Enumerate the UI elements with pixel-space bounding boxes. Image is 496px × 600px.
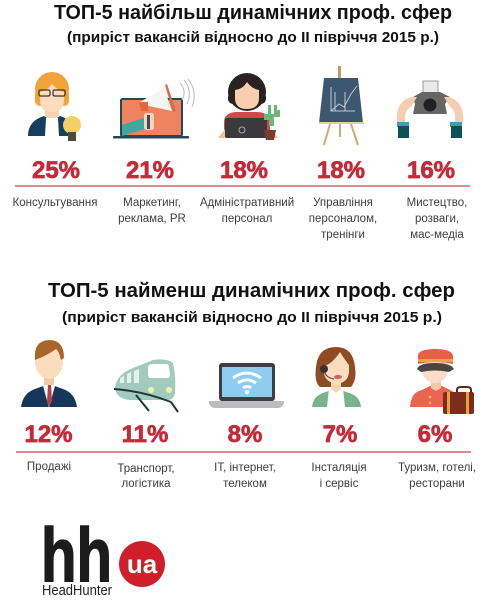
logo: hh.ua HeadHunter: hh xyxy=(41,513,112,598)
icon: hands holding camera xyxy=(397,81,463,138)
labels row 1: персоналом, xyxy=(309,213,377,225)
labels row 1: Консультування xyxy=(13,197,97,209)
title: least dynamic: ТОП-5 найменш динамічних проф. сфер xyxy=(48,280,455,302)
percentages row 2 xyxy=(24,421,452,448)
title: least dynamic xyxy=(48,280,455,326)
labels row 1: розваги, xyxy=(415,213,459,225)
title: least dynamic: (приріст вакансій відносно до II півріччя 2015 р.) xyxy=(62,309,442,326)
icon: administrative worker at laptop xyxy=(218,73,280,140)
logo: hh.ua HeadHunter: ua xyxy=(127,549,158,579)
labels row 2: Продажі xyxy=(27,461,71,473)
percentages row 1: 16% xyxy=(407,157,455,184)
labels row 1 xyxy=(13,197,467,241)
labels row 1: Мистецтво, xyxy=(407,197,467,209)
percentages row 2: 11% xyxy=(122,421,168,448)
icon: easel with chart xyxy=(319,66,364,145)
labels row 1: мас-медіа xyxy=(410,229,464,241)
labels row 1: Адміністративний xyxy=(200,197,294,209)
labels row 2: і сервіс xyxy=(320,478,359,490)
icon: train xyxy=(114,359,178,412)
percentages row 1 xyxy=(32,157,455,184)
icon: marketing laptop with megaphone xyxy=(113,79,194,138)
percentages row 1: 21% xyxy=(126,157,174,184)
percentages row 2: 6% xyxy=(418,421,452,448)
labels row 1: персонал xyxy=(222,213,272,225)
percentages row 2: 8% xyxy=(228,421,262,448)
labels row 1: Управління xyxy=(313,197,373,209)
labels row 2: Транспорт, xyxy=(117,463,175,475)
logo: hh.ua HeadHunter: HeadHunter xyxy=(42,582,112,599)
labels row 2: логістика xyxy=(121,478,171,490)
percentages row 1: 25% xyxy=(32,157,80,184)
percentages row 1: 18% xyxy=(317,157,365,184)
labels row 1: Маркетинг, xyxy=(123,197,181,209)
title: most dynamic xyxy=(54,2,452,46)
icon: support operator with headset xyxy=(312,347,361,407)
title: most dynamic: (приріст вакансій відносно до II півріччя 2015 р.) xyxy=(67,29,439,46)
icon: consultant with light bulb xyxy=(28,72,81,141)
labels row 2: Туризм, готелі, xyxy=(398,462,476,474)
labels row 1: тренінги xyxy=(321,229,365,241)
labels row 2: IT, інтернет, xyxy=(214,462,276,474)
percentages row 2: 12% xyxy=(24,421,73,448)
labels row 1: реклама, PR xyxy=(118,213,186,225)
labels row 2: телеком xyxy=(223,478,267,490)
percentages row 1: 18% xyxy=(220,157,268,184)
labels row 2: ресторани xyxy=(409,478,465,490)
icon: laptop with wifi xyxy=(209,363,284,408)
title: most dynamic: ТОП-5 найбільш динамічних проф. сфер xyxy=(54,2,452,24)
icon: salesman in suit xyxy=(21,340,77,408)
labels row 2: Інсталяція xyxy=(311,462,367,474)
labels row 2 xyxy=(27,461,476,490)
icon: bellhop with suitcase xyxy=(410,349,474,414)
percentages row 2: 7% xyxy=(323,421,357,448)
